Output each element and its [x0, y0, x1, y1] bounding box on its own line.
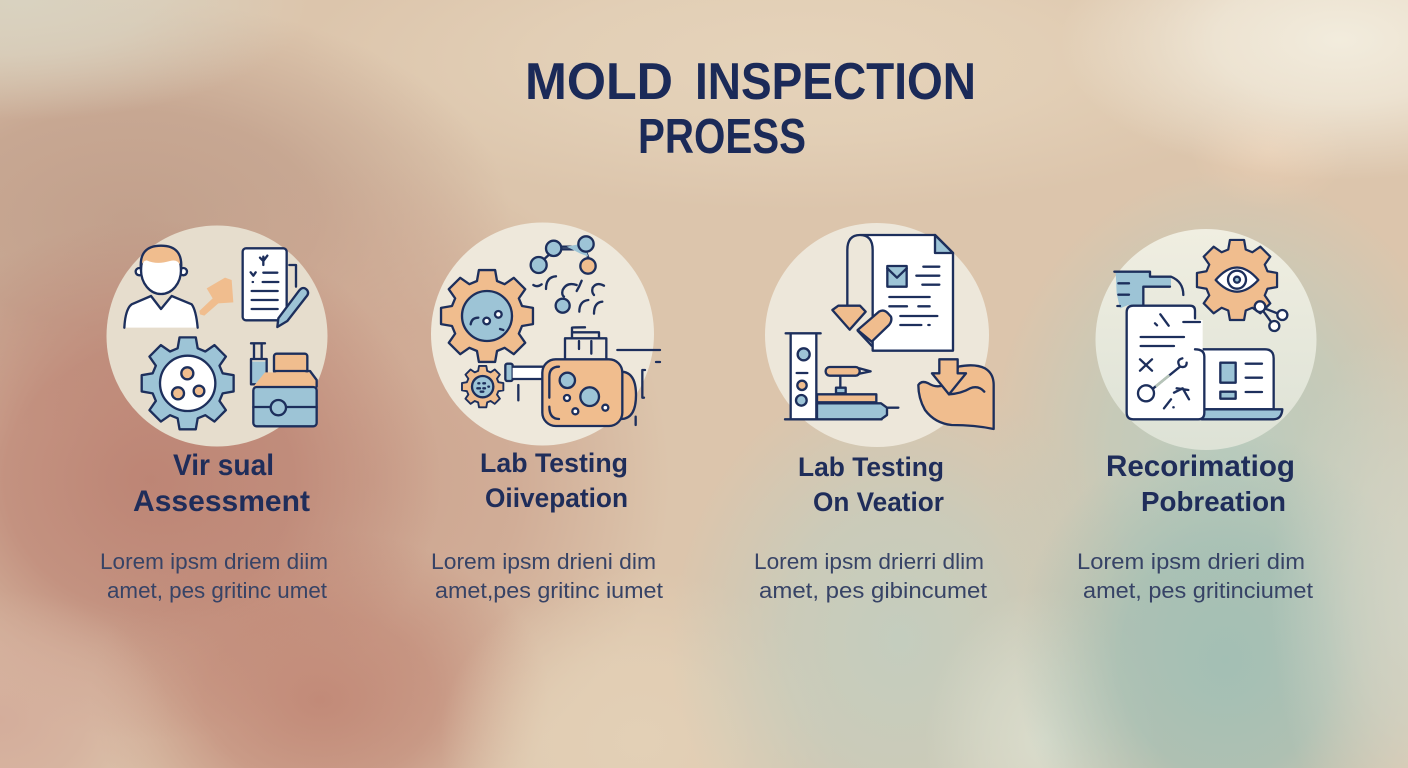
body text 1	[100, 549, 328, 603]
panel: step 1 visual assessment	[100, 226, 328, 603]
title: MOLD	[525, 53, 673, 111]
icon: inspector	[124, 246, 198, 328]
icon: small gear	[462, 366, 503, 407]
body text 3	[754, 549, 988, 603]
circle backdrop 3	[765, 223, 989, 447]
body text 2: Lorem ipsm drieni dim	[431, 549, 656, 574]
heading 3: Lab Testing	[798, 452, 944, 482]
icon: sample kit	[251, 343, 317, 426]
heading 1: Assessment	[133, 485, 310, 518]
title	[525, 53, 976, 164]
icon: inspector, document, gear, kit	[124, 246, 317, 429]
heading 2: Lab Testing	[480, 448, 628, 478]
body text 3: Lorem ipsm drierri dlim	[754, 549, 984, 574]
icon: test rack and microscope	[785, 333, 898, 419]
icon: sample capsule	[832, 306, 891, 346]
icon: spray nozzle	[1114, 272, 1183, 308]
body text 4: Lorem ipsm drieri dim	[1077, 549, 1305, 574]
icon: molecule and spores	[531, 236, 604, 314]
icon: report document	[847, 235, 953, 351]
icon: pointer arrow	[199, 278, 233, 316]
body text 2: amet,pes gritinc iumet	[435, 578, 664, 603]
icon: gears, molecule, machine	[441, 236, 660, 426]
icon: gear with eye	[1197, 240, 1277, 320]
title: INSPECTION	[695, 53, 976, 111]
title: PROESS	[638, 110, 806, 164]
heading 3: On Veatior	[813, 487, 944, 517]
icon: gear eye, clipboard, laptop	[1114, 240, 1287, 419]
panel: step 3 lab testing	[754, 223, 994, 603]
heading 4	[1106, 450, 1295, 517]
icon: clipboard with wrench	[1127, 306, 1205, 419]
icon: gear with spores	[142, 337, 234, 429]
heading 4: Pobreation	[1141, 486, 1286, 517]
panel: step 2 lab testing	[431, 222, 664, 603]
circle backdrop 1	[106, 226, 328, 446]
body text 3: amet, pes gibincumet	[759, 578, 988, 603]
body text 2	[431, 549, 664, 603]
body text 1: amet, pes gritinc umet	[107, 578, 328, 603]
heading 1	[133, 449, 310, 518]
heading 2	[480, 448, 628, 513]
heading 1: Vir sual	[173, 449, 274, 482]
body text 1: Lorem ipsm driem diim	[100, 549, 328, 574]
icon: laptop	[1198, 349, 1282, 419]
circle backdrop 4	[1096, 229, 1316, 450]
heading 3	[798, 452, 944, 517]
icon: report, sample, microscope, hand	[785, 235, 994, 429]
icon: connected nodes	[1255, 301, 1287, 331]
panel: step 4 recommendations	[1077, 229, 1316, 603]
body text 4: amet, pes gritinciumet	[1083, 578, 1314, 603]
circle backdrop 2	[431, 222, 654, 446]
heading 4: Recorimatiog	[1106, 450, 1295, 483]
icon: large gear	[441, 270, 533, 362]
icon: report with pencil	[243, 248, 308, 327]
heading 2: Oiivepation	[485, 483, 628, 513]
icon: hand with down arrow	[918, 359, 994, 429]
icon: sampling machine	[505, 327, 660, 426]
body text 4	[1077, 549, 1314, 603]
